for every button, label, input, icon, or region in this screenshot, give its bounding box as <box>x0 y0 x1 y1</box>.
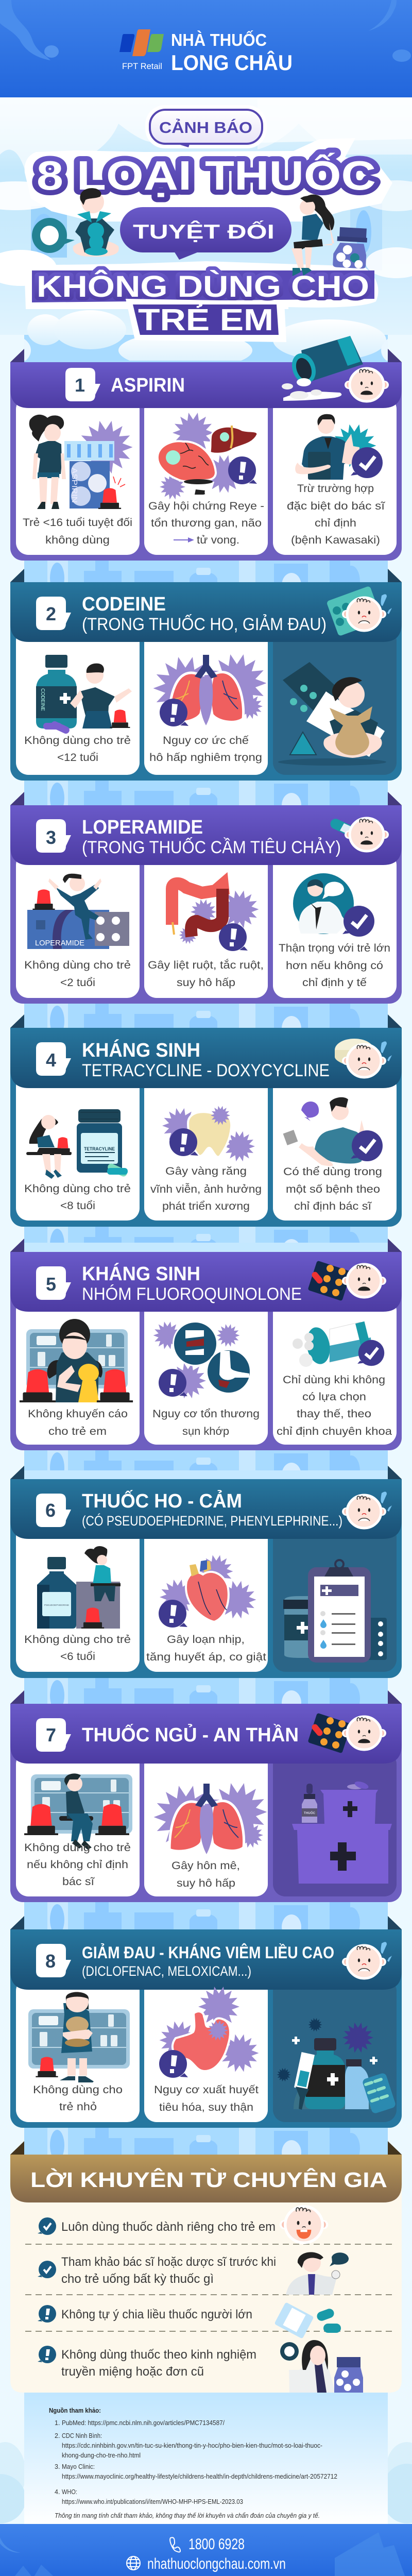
card 3.1: LOPERAMIDE <box>35 939 84 947</box>
references block: 3. <box>55 2463 60 2470</box>
card 3.1 <box>24 874 131 989</box>
icon: pill speech bubble <box>32 218 75 253</box>
heading <box>10 2155 402 2202</box>
side clouds near references <box>0 2442 412 2523</box>
references block: Mayo Clinic: <box>62 2463 95 2470</box>
header 2 <box>10 582 402 642</box>
header 5: NHÓM FLUOROQUINOLONE <box>82 1284 302 1304</box>
advice 4 <box>38 2340 363 2393</box>
card 3.3: chỉ định y tế <box>302 977 367 989</box>
card 3.2 <box>148 884 264 989</box>
card 4.3 <box>283 1097 383 1212</box>
header 5 <box>10 1252 402 1312</box>
header 6: (CÓ PSEUDOEPHEDRINE, PHENYLEPHRINE...) <box>82 1513 342 1529</box>
card 4.3: chỉ định bác sĩ <box>294 1200 372 1212</box>
icon: sad baby with drops <box>342 1492 392 1528</box>
dividers <box>25 2244 396 2331</box>
header 8 <box>10 1929 402 1990</box>
card 1.3: (bệnh Kawasaki) <box>291 534 380 546</box>
background column behind sections <box>24 361 388 2165</box>
header 3: (TRONG THUỐC CẦM TIÊU CHẢY) <box>82 837 341 857</box>
advice 3 <box>38 2302 341 2339</box>
card 1.2: tử vong. <box>197 534 239 546</box>
references block: Nguồn tham khảo: <box>49 2406 101 2414</box>
card 8.2: tiêu hóa, suy thận <box>159 2102 253 2113</box>
header 4 <box>10 1028 402 1088</box>
logo mark <box>119 29 164 71</box>
card 2.2 <box>149 654 267 764</box>
panel 7: sleeping pills <box>10 1690 402 1902</box>
advice 2: Tham khảo bác sĩ hoặc dược sĩ trước khi <box>61 2255 276 2269</box>
title line: trẻ em: TRẺ EM <box>138 302 273 337</box>
card 7.1: Không dùng cho trẻ <box>24 1842 131 1854</box>
card 4.1: TETRACYLINE <box>84 1146 115 1151</box>
card 4.2: phát triển xương <box>162 1200 250 1212</box>
card 3.3: hơn nếu không có <box>286 960 383 972</box>
card 6.1: PSEUDOEPHEDRINE <box>44 1604 69 1606</box>
hero sky background with clouds <box>0 97 412 369</box>
references block: 4. <box>55 2488 60 2496</box>
header 8: (DICLOFENAC, MELOXICAM...) <box>82 1963 251 1979</box>
header 8: GIẢM ĐAU - KHÁNG VIÊM LIỀU CAO <box>82 1943 334 1962</box>
icon: pill packet and capsules <box>274 2302 341 2339</box>
header 6: THUỐC HO - CẢM <box>82 1489 242 1512</box>
card 1.1 <box>23 415 133 546</box>
heading: LỜI KHUYÊN TỪ CHUYÊN GIA <box>30 2168 387 2192</box>
card 6.2 <box>146 1555 266 1663</box>
card 2.3: sad boy illustration <box>278 662 386 766</box>
card 8.3: medicine group <box>277 2018 397 2114</box>
brand name: NHÀ THUỐC <box>171 30 267 49</box>
card 1.3: Trừ trường hợp <box>297 483 374 495</box>
header 4: TETRACYCLINE - DOXYCYCLINE <box>82 1061 330 1080</box>
references block: khong-dung-cho-tre-nho.html <box>62 2452 141 2459</box>
title line: trẻ em <box>126 299 286 342</box>
advice 1: Luôn dùng thuốc dành riêng cho trẻ em <box>61 2220 276 2234</box>
header 8: 8 <box>45 1951 56 1972</box>
card 5.3: Chỉ dùng khi không <box>283 1374 385 1386</box>
panel 1: aspirin <box>10 336 402 561</box>
card 4.1: <8 tuổi <box>60 1200 95 1212</box>
references block: CDC Ninh Bình: <box>62 2432 102 2439</box>
card 2.1 <box>24 655 132 764</box>
references block: 2. <box>55 2432 60 2439</box>
advice 1 <box>38 2207 328 2243</box>
card 4.1 <box>24 1109 131 1212</box>
card 3.3 <box>279 873 390 989</box>
card 7.2: Gây hôn mê, <box>171 1860 240 1872</box>
card 3.3: Thận trọng với trẻ lớn <box>279 942 390 954</box>
title block: warning title <box>24 105 392 342</box>
card 8.2 <box>154 1987 259 2113</box>
card 5.3 <box>277 1321 392 1437</box>
card 4.2 <box>150 1106 262 1212</box>
card 6.2: Gây loạn nhịp, <box>167 1634 245 1646</box>
card 2.2: hô hấp nghiêm trọng <box>149 752 262 764</box>
card 1.2: Gây hội chứng Reye - <box>148 500 264 512</box>
header 7: 7 <box>46 1724 56 1745</box>
header 4: 4 <box>46 1049 56 1071</box>
card 6.2: tăng huyết áp, co giật <box>146 1651 266 1663</box>
icon: doctor with stethoscope <box>286 2252 349 2295</box>
card 1.3: đặc biệt do bác sĩ <box>287 500 385 512</box>
warning bubble <box>145 105 267 148</box>
advice 2: cho trẻ uống bất kỳ thuốc gì <box>61 2272 214 2286</box>
icon: sad baby with drops <box>342 1942 392 1978</box>
header 7: THUỐC NGỦ - AN THẦN <box>82 1723 299 1746</box>
card 1.3 <box>287 414 385 546</box>
header 3 <box>10 805 402 865</box>
icon: hero girl sitting <box>291 195 334 276</box>
title line: không dùng cho: KHÔNG DÙNG CHO <box>37 270 369 303</box>
card 2.1: CODEINE <box>40 688 45 711</box>
advice 3: Không tự ý chia liều thuốc người lớn <box>61 2308 252 2321</box>
card 1.1: Trẻ <16 tuổi tuyệt đối <box>23 517 132 529</box>
header 7 <box>10 1704 402 1764</box>
header 2: CODEINE <box>82 594 166 615</box>
panel 8: high dose painkillers <box>10 1916 402 2128</box>
title line: tuyệt đối pill <box>120 207 291 260</box>
header 1 <box>10 362 402 408</box>
icon: blister and sad baby <box>326 586 392 636</box>
icon: pharmacist with pill bottle <box>280 2340 363 2393</box>
card 4.1: Không dùng cho trẻ <box>24 1183 131 1195</box>
card 4.2: vĩnh viễn, ảnh hưởng <box>150 1183 262 1195</box>
references block: https://www.who.int/publications/i/item/WHO-MHP-HPS-EML-2023.03 <box>62 2498 243 2505</box>
header bar with logo <box>0 0 412 97</box>
card 7.3: medicine boxes <box>292 1780 392 1884</box>
title line: tuyệt đối pill: TUYỆT ĐỐI <box>133 220 274 243</box>
card 2.1: <12 tuổi <box>57 752 98 764</box>
card 5.1: cho trẻ em <box>48 1426 107 1437</box>
card 1.1: ASPIRIN <box>70 468 79 503</box>
card 1.1: không dùng <box>45 534 110 546</box>
panel 4: tetracycline <box>10 1014 402 1227</box>
icon: hero pill jar <box>333 227 368 269</box>
card 1.3: chỉ định <box>315 517 356 529</box>
card 8.1: trẻ nhỏ <box>59 2101 97 2113</box>
card 5.2: sụn khớp <box>182 1426 229 1437</box>
card 7.3: medicine boxes: THUỐC <box>304 1811 316 1815</box>
header 6: 6 <box>45 1500 56 1521</box>
icon: phone <box>170 2537 180 2552</box>
references block: https://cdc.ninhbinh.gov.vn/tin-tuc-su-kien/thong-tin-y-hoc/pho-bien-kien-thuc/mot-so-loai-thuoc- <box>62 2442 322 2449</box>
card 2.2: Nguy cơ ức chế <box>163 735 249 747</box>
advice 4: Không dùng thuốc theo kinh nghiệm <box>61 2348 256 2362</box>
card 5.3: có lựa chọn <box>302 1391 366 1403</box>
advice 4: truyền miệng hoặc đơn cũ <box>61 2365 204 2379</box>
card 6.1 <box>24 1546 131 1663</box>
header 5: 5 <box>46 1274 56 1295</box>
card 3.2: Gây liệt ruột, tắc ruột, <box>148 959 264 971</box>
card 7.1: bác sĩ <box>62 1876 95 1888</box>
header 1: 1 <box>75 375 85 396</box>
card 5.1: Không khuyến cáo <box>28 1408 128 1420</box>
header 2: (TRONG THUỐC HO, GIẢM ĐAU) <box>82 614 327 634</box>
panel: expert advice <box>10 2141 402 2393</box>
references block <box>24 2393 388 2524</box>
references block: PubMed: https://pmc.ncbi.nlm.nih.gov/articles/PMC7134587/ <box>62 2419 225 2427</box>
card 8.1: Không dùng cho <box>33 2084 123 2096</box>
panel 5: fluoroquinolone <box>10 1239 402 1450</box>
card 2.1: Không dùng cho trẻ <box>24 735 131 747</box>
references block: https://www.mayoclinic.org/healthy-lifestyle/childrens-health/in-depth/childrens-medicine/art-20572712 <box>62 2473 337 2480</box>
panel 6: cough and cold <box>10 1466 402 1678</box>
card 1.2 <box>148 413 264 546</box>
warning bubble: CẢNH BÁO <box>159 118 252 137</box>
card 7.2 <box>153 1783 267 1889</box>
phone number: 1800 6928 <box>188 2536 245 2553</box>
card 5.2 <box>152 1321 260 1437</box>
card 5.3: chỉ định chuyên khoa <box>277 1426 392 1437</box>
card 3.2: suy hô hấp <box>177 977 235 989</box>
card 6.3: clipboard and medicine <box>283 1560 387 1663</box>
website: nhathuoclongchau.com.vn <box>147 2555 286 2572</box>
card 8.2: Nguy cơ xuất huyết <box>154 2084 259 2096</box>
card 4.2: Gây vàng răng <box>165 1165 247 1177</box>
brand name: LONG CHÂU <box>171 50 293 75</box>
header 3: LOPERAMIDE <box>82 817 203 838</box>
card 8.1 <box>28 1992 130 2113</box>
panel 2: codeine <box>10 569 402 781</box>
icon: spilled pill bottle and scared baby <box>282 336 389 401</box>
card 4.3: một số bệnh theo <box>286 1183 380 1195</box>
brand name <box>171 30 293 75</box>
header 1: ASPIRIN <box>111 375 185 396</box>
card 5.3: thay thế, theo <box>297 1408 371 1420</box>
icon: globe <box>127 2556 140 2570</box>
logo mark: FPT Retail <box>122 61 162 71</box>
card 5.1 <box>20 1319 133 1437</box>
header 6 <box>10 1479 402 1539</box>
title line: 8 loại thuốc <box>25 138 392 222</box>
card 6.1: <6 tuổi <box>60 1651 95 1663</box>
card 7.1: nếu không chỉ định <box>27 1859 128 1871</box>
title line: không dùng cho <box>24 261 378 309</box>
card 5.2: Nguy cơ tổn thương <box>152 1408 260 1420</box>
panel 3: loperamide <box>10 792 402 1004</box>
icon: blister and scared baby <box>307 1713 386 1753</box>
references block: Thông tin mang tính chất tham khảo, không thay thế lời khuyên và chẩn đoán của chuyên gia y tế. <box>55 2512 320 2519</box>
icon: big tablet and sad baby <box>335 1039 392 1077</box>
card 4.3: Có thể dùng trong <box>283 1166 382 1178</box>
icon: orange blister and scared baby <box>307 1261 386 1301</box>
references block: WHO: <box>62 2488 77 2496</box>
header 2: 2 <box>46 603 56 624</box>
card 3.1: <2 tuổi <box>60 977 95 989</box>
header 4: KHÁNG SINH <box>82 1039 200 1061</box>
footer contact bar <box>0 2524 412 2576</box>
card 7.2: suy hô hấp <box>177 1877 235 1889</box>
icon: capsule and scared baby <box>329 817 389 851</box>
advice 2 <box>38 2252 349 2295</box>
header 5: KHÁNG SINH <box>82 1262 200 1285</box>
header 3: 3 <box>46 827 56 848</box>
icon: hero boy with bunny <box>73 188 119 257</box>
references block: 1. <box>55 2419 60 2427</box>
card 6.1: Không dùng cho trẻ <box>24 1634 131 1646</box>
card 1.2: tổn thương gan, não <box>151 517 262 529</box>
card 7.1 <box>24 1773 132 1888</box>
title line: 8 loại thuốc: 8 LOẠI THUỐC <box>37 152 376 198</box>
card 3.1: Không dùng cho trẻ <box>24 959 131 971</box>
